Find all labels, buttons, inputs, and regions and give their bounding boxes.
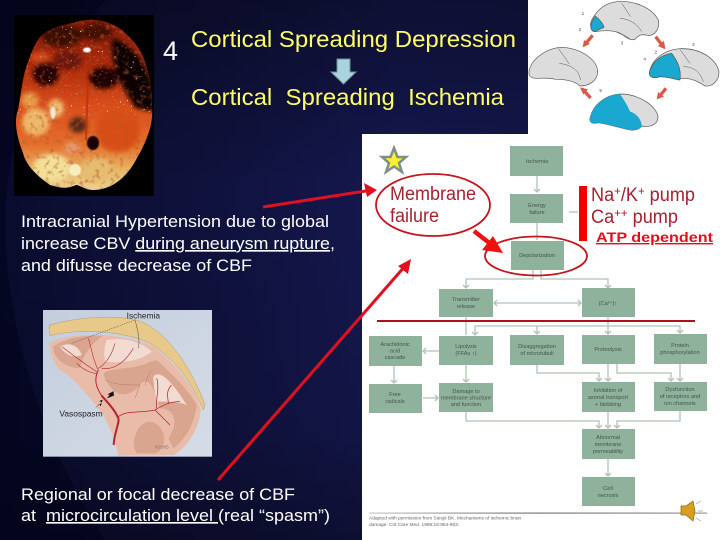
diagram leader labels: 2	[655, 49, 658, 54]
box: dysfunction of receptors: Dysfunction	[665, 387, 695, 393]
divider line	[377, 320, 695, 322]
box: depolarization	[511, 241, 564, 270]
arrow: regional decrease to membrane	[218, 259, 411, 480]
box: cell necrosis: Cell	[603, 486, 613, 492]
box: abnormal membrane permeability: Abnormal	[596, 435, 620, 441]
text: regional decrease: Regional or focal decrease of CBF	[21, 486, 295, 504]
text: pumps: Ca	[591, 207, 615, 228]
box: free radicals: Free	[389, 392, 401, 398]
label: vasospasm: Vasospasm	[59, 408, 103, 418]
box: ischemia	[510, 146, 563, 176]
box: transmitter release	[439, 289, 493, 317]
icon: speaker	[681, 501, 703, 521]
box: energy failure: failure	[529, 210, 545, 216]
diagram: progression of brain lesion	[529, 1, 719, 130]
box: inhibition of axonal transport: + blebbing	[595, 402, 621, 408]
text: pumps: +	[638, 184, 645, 198]
diagram leader labels	[579, 11, 695, 93]
caption: Adapted with permission from Siesjö BK. Mechanisms of ischemic brain	[369, 516, 522, 522]
text: pumps: pump	[628, 207, 678, 228]
arrow: hypertension to membrane failure	[263, 183, 377, 207]
number 4: 4	[163, 36, 178, 66]
text: regional decrease: at microcirculation level (real “spasm”)	[21, 507, 330, 525]
box: damage to membrane: membrane structure	[441, 396, 491, 402]
flow chart boxes	[369, 146, 707, 506]
box: abnormal membrane permeability: membrane	[595, 442, 621, 448]
box: arachidonic acid cascade: Arachidonic	[380, 342, 410, 348]
text: intracranial hypertension: Intracranial Hypertension due to global	[21, 213, 329, 231]
box: inhibition of axonal transport: Inhibition of	[594, 388, 623, 394]
skull band	[49, 317, 205, 410]
text: pumps: ++	[614, 206, 628, 220]
box: dysfunction of receptors	[654, 382, 707, 411]
callout: depolarization ellipse	[485, 236, 587, 276]
white panel: flow chart	[362, 134, 720, 540]
image credit: ©2005	[155, 443, 169, 449]
arrow: membrane failure to depolarization	[474, 231, 503, 253]
vasospasm arrowheads	[94, 391, 114, 409]
diagram leader labels: 5	[599, 88, 602, 93]
box: energy failure: Energy	[528, 203, 546, 209]
box: inhibition of axonal transport	[582, 382, 635, 412]
box: depolarization: Depolarization	[519, 253, 555, 259]
box: arachidonic acid cascade: cascade	[385, 355, 405, 361]
diagram leader labels: 2	[579, 27, 582, 32]
diagram leader labels: 3	[621, 40, 624, 45]
callout: membrane ellipse	[376, 174, 490, 236]
image: vasospasm illustration	[43, 310, 212, 457]
text: regional decrease	[21, 486, 330, 525]
diagram leader labels: 3	[692, 42, 695, 47]
diagram leader labels: 1	[582, 11, 585, 16]
brain: right	[649, 49, 719, 86]
box: dysfunction of receptors: ion channels	[664, 401, 696, 407]
box: lipolysis: Lipolysis	[455, 344, 477, 350]
box: ischemia: Ischemia	[526, 159, 549, 165]
dashed ischemia boundary	[72, 320, 135, 343]
text: intracranial hypertension: increase CBV during aneurysm rupture ,	[21, 235, 335, 253]
box: damage to membrane: and function	[451, 402, 481, 408]
arteries	[62, 338, 180, 445]
text: pumps: /K	[621, 185, 638, 206]
box: free radicals: radicals	[385, 399, 405, 405]
text: pumps: pump	[645, 185, 695, 206]
white matter	[60, 339, 187, 405]
text: intracranial hypertension: and difusse decrease of CBF	[21, 257, 252, 275]
box: arachidonic acid cascade	[369, 336, 422, 366]
box: dysfunction of receptors: of receptors and	[660, 394, 700, 400]
text: pumps: Na	[591, 185, 615, 206]
icon: star	[382, 148, 406, 172]
box: cell necrosis: necrosis	[598, 493, 619, 499]
box: free radicals	[369, 384, 422, 413]
brain	[50, 335, 201, 456]
box: inhibition of axonal transport: axonal transport	[588, 395, 628, 401]
box: arachidonic acid cascade: acid	[390, 348, 400, 354]
box: proteolysis	[582, 335, 635, 364]
box: lipolysis	[439, 336, 493, 365]
box: transmitter release: Transmitter	[452, 297, 480, 303]
text: membrane failure: failure	[390, 206, 439, 227]
box: proteolysis: Proteolysis	[594, 347, 622, 353]
caption: damage. Crit Care Med. 1988;16:954-963.	[369, 522, 459, 528]
text: pumps	[591, 184, 695, 228]
box: protein phosphorylation: Protein	[671, 343, 689, 349]
label: ischemia: Ischemia	[127, 310, 160, 320]
box: protein phosphorylation: phosphorylation	[660, 350, 700, 356]
text: ATP dependent: ATP dependent	[596, 229, 713, 245]
text: pumps: +	[614, 184, 621, 198]
box: abnormal membrane permeability: permeability	[593, 449, 623, 455]
box: transmitter release: release	[457, 304, 475, 310]
text: intracranial hypertension	[21, 213, 335, 275]
box: disaggregation: of microtubuli	[520, 351, 554, 357]
caption	[369, 516, 522, 528]
brain: left	[529, 47, 598, 86]
arrows between brains	[582, 35, 666, 98]
box: disaggregation: Disaggregation	[518, 344, 556, 350]
cortex folds	[53, 336, 197, 453]
heading: cortical spreading depression: Cortical Spreading Depression	[191, 26, 516, 52]
box: lipolysis: (FFAs ↑)	[455, 351, 477, 357]
box: damage to membrane: Damage to	[452, 389, 480, 395]
red bar: pump block	[579, 186, 587, 241]
footer rule	[369, 512, 707, 514]
white panel: top right	[528, 0, 720, 134]
icon: down arrow	[331, 59, 356, 84]
box: protein phosphorylation	[654, 334, 707, 364]
box: energy failure	[510, 194, 563, 223]
heading: cortical spreading ischemia: Cortical Spreading Ischemia	[191, 84, 505, 110]
box: cell necrosis	[582, 477, 635, 506]
box: calcium: [Ca²⁺]↑	[599, 300, 617, 307]
brain photograph	[14, 15, 156, 196]
brain: bottom	[590, 94, 658, 130]
flow chart connectors	[391, 176, 683, 476]
box: disaggregation	[510, 335, 564, 365]
box: abnormal membrane permeability	[582, 429, 635, 459]
box: calcium	[582, 288, 635, 317]
box: damage to membrane	[439, 383, 493, 412]
brain: top	[591, 1, 659, 40]
text: membrane failure	[390, 184, 476, 227]
text: membrane failure: Membrane	[390, 184, 476, 205]
diagram leader labels: 4	[643, 57, 646, 62]
